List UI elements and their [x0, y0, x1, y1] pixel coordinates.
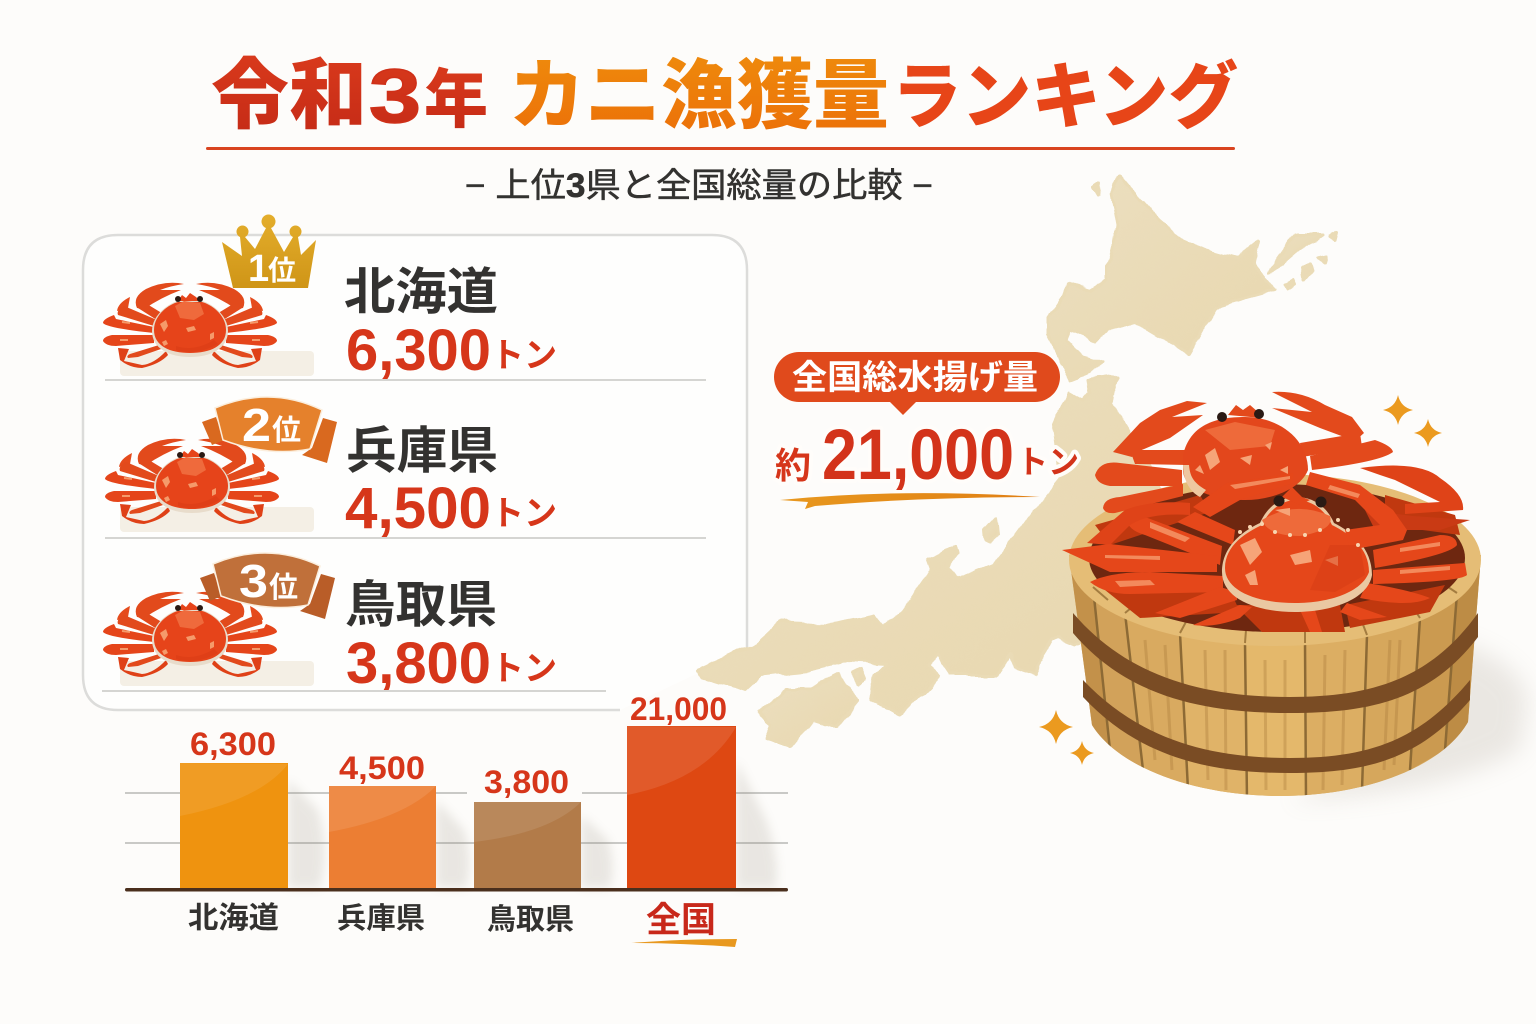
tub bands: [1073, 613, 1478, 773]
axis label: Tottori: 鳥取県: [487, 903, 574, 936]
title: year: 3: [369, 54, 421, 139]
sparkle: upper right small: [1414, 419, 1442, 447]
ribbon badge 2nd: 2: [242, 399, 271, 451]
sparkle: lower left small: [1070, 741, 1094, 765]
ribbon badge 3rd: [200, 553, 335, 619]
beige tab: [120, 507, 314, 532]
bar: national: [627, 726, 736, 890]
sparkle: lower left large: [1039, 710, 1073, 744]
panel: ranking card: [83, 235, 747, 710]
underline swoosh: [780, 493, 1040, 509]
bar: Hokkaido: [180, 763, 288, 890]
axis label: national: 全国: [646, 901, 716, 940]
beige tab: [120, 351, 314, 376]
title: year: [211, 53, 488, 139]
crown badge 1st: 1: [248, 248, 269, 290]
prefecture name: 鳥取県: [345, 577, 497, 633]
title rule: [206, 147, 1235, 150]
callout: national total: [774, 352, 1079, 509]
crown badge 1st: 位: [268, 255, 296, 286]
beige tab: [120, 661, 314, 686]
title: ranking: ランキング: [892, 58, 1238, 138]
speech bubble: [774, 352, 1060, 415]
title: year: 年: [424, 64, 488, 136]
unit: トン: [491, 495, 557, 533]
icon: crab: [105, 439, 279, 524]
icon: crab: [103, 283, 277, 368]
value: 3,800: 3,800: [484, 764, 569, 800]
unit: トン: [491, 337, 557, 375]
ribbon badge 3rd: 位: [269, 571, 298, 604]
ribbon badge 2nd: [202, 397, 337, 463]
front crab: [1062, 472, 1470, 626]
ribbon badge 2nd: 位: [272, 414, 301, 447]
rank row 2: Hyogo: [105, 397, 557, 541]
axis label: Hyogo: 兵庫県: [337, 902, 425, 935]
value: 21,000: 21,000: [630, 691, 727, 727]
total value: 21,000: [822, 416, 1014, 495]
bar: Hyogo: [329, 786, 436, 890]
filler legs inside tub: [1095, 495, 1460, 632]
subtitle: − 上位3県と全国総量の比較 −: [465, 167, 933, 205]
approx: 約: [775, 445, 811, 486]
tub shadow: [1290, 640, 1528, 800]
icon: crab: [103, 592, 277, 677]
value: 6,300: 6,300: [190, 726, 276, 762]
tonnage: 3,800: [346, 631, 491, 696]
bar: Tottori: [474, 802, 581, 890]
illustration: crabs in wooden tub: [1060, 392, 1490, 800]
tub interior: [1089, 484, 1465, 632]
rank row 1: Hokkaido: [103, 214, 557, 383]
title: [211, 53, 1238, 139]
prefecture name: 兵庫県: [346, 423, 498, 479]
bubble label: 全国総水揚げ量: [792, 359, 1038, 397]
prefecture name: 北海道: [344, 264, 498, 320]
crown badge 1st: [222, 214, 316, 290]
back crab: [1095, 392, 1463, 514]
title: crab catch: カニ漁獲量: [509, 54, 889, 139]
title: year: 令和: [211, 53, 367, 139]
axis label: Hokkaido: 北海道: [188, 902, 279, 935]
unit: トン: [491, 650, 557, 688]
unit: トン: [1017, 444, 1079, 480]
tub body: [1069, 555, 1481, 796]
tonnage: 4,500: [345, 476, 491, 541]
bar chart: [125, 691, 788, 947]
value: 4,500: 4,500: [339, 750, 425, 786]
tonnage: 6,300: [346, 318, 491, 383]
rank row 3: Tottori: [103, 553, 557, 696]
tub rim: [1069, 474, 1481, 646]
map of Japan: [698, 176, 1336, 746]
ribbon badge 3rd: 3: [239, 555, 268, 607]
sparkle: upper right large: [1383, 395, 1413, 425]
